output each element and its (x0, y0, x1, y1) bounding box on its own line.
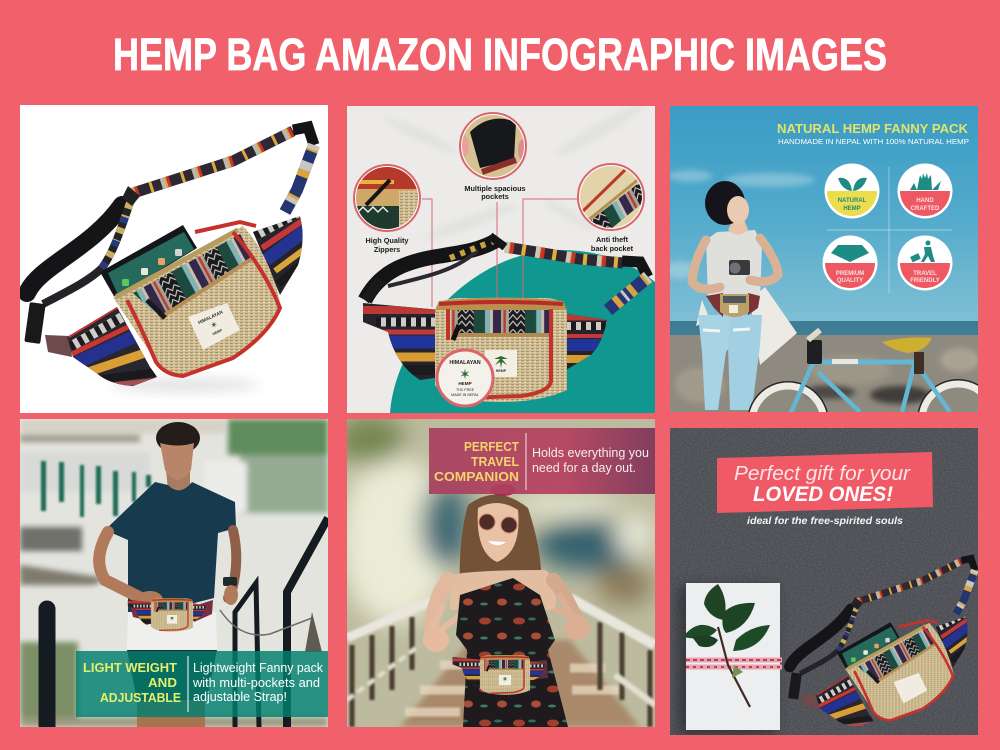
badge: hand crafted: CRAFTED (911, 206, 940, 212)
subheading: HANDMADE IN NEPAL WITH 100% NATURAL HEMP (778, 137, 969, 146)
badge grid dividers (827, 167, 952, 293)
callout connector lines (422, 199, 577, 307)
clouds (664, 170, 815, 279)
badge: hand crafted: HAND (916, 198, 934, 204)
bag label text: HEMP (496, 369, 507, 373)
caption heading: COMPANION (434, 469, 519, 484)
bag label text (198, 310, 223, 336)
caption body: Holds everything you (532, 446, 649, 460)
callout: spacious pockets (457, 113, 528, 201)
caption band (429, 428, 655, 494)
belt straps (365, 236, 648, 310)
gift box (683, 583, 782, 730)
wall texture (675, 348, 980, 404)
icon: hand with leaves (910, 173, 941, 190)
caption heading: PERFECT (464, 439, 519, 454)
label detail circle: HEMP (458, 381, 472, 386)
caption body: Lightweight Fanny pack (193, 660, 323, 675)
icon: diamond (831, 245, 869, 262)
right railing (570, 598, 655, 727)
back pocket caption second line: back pocket (591, 244, 634, 253)
blurred surroundings (20, 419, 328, 727)
pockets caption: Multiple spacious (464, 184, 526, 193)
stone wall (670, 335, 978, 412)
holly sprig (683, 584, 770, 707)
badge: natural hemp: NATURAL (838, 198, 867, 204)
caption body: adjustable Strap! (193, 689, 287, 704)
teal circle backdrop (390, 250, 655, 413)
zipper caption: High Quality (366, 236, 409, 245)
badge: travel friendly: TRAVEL (913, 271, 937, 277)
foliage blobs (335, 415, 655, 625)
caption body: need for a day out. (532, 461, 636, 475)
twine ribbon (686, 660, 782, 667)
caption body (532, 446, 649, 475)
stair treads (405, 665, 620, 712)
hemp fanny pack with tablet (24, 127, 314, 386)
callout: anti theft back pocket (578, 164, 646, 253)
bag label text: HEMP (212, 328, 223, 336)
panel: travel companion photo (335, 415, 655, 727)
marble veins (393, 109, 636, 235)
stairs (400, 640, 640, 727)
icon: leaves (838, 178, 867, 191)
callout: high quality zippers (354, 165, 420, 254)
panel: natural hemp beach photo (670, 106, 978, 412)
sky (670, 106, 978, 322)
pockets caption second line: pockets (481, 192, 509, 201)
woman (423, 484, 590, 727)
caption divider (525, 433, 527, 490)
badge: hand crafted (898, 164, 952, 218)
buckle (364, 299, 370, 303)
hemp bag on carpet (788, 559, 975, 727)
label detail circle: THC FREE (456, 388, 475, 392)
zipper caption second line: Zippers (374, 245, 400, 254)
carpet texture (670, 428, 978, 735)
badge: natural hemp (824, 164, 880, 218)
back pocket caption: Anti theft (596, 235, 629, 244)
pocket detail circle (457, 113, 528, 179)
bag label text: HIMALAYAN (197, 309, 224, 325)
woman with bag (692, 181, 797, 410)
banner line one: Perfect gift for your (734, 463, 911, 485)
panel background (20, 105, 328, 413)
caption divider (187, 656, 189, 712)
carpet background (670, 428, 978, 735)
caption heading: TRAVEL (471, 454, 519, 469)
banner line two: LOVED ONES! (753, 483, 893, 506)
gift tagline: ideal for the free-spirited souls (747, 516, 903, 527)
hemp bag front (361, 298, 611, 402)
concrete background (20, 419, 328, 727)
caption heading (434, 439, 519, 484)
bicycle (748, 328, 978, 412)
badge: premium quality (822, 236, 878, 290)
label detail circle: HIMALAYAN (449, 360, 481, 366)
blurred foliage background (347, 419, 655, 727)
runner (99, 422, 238, 727)
left railing (347, 597, 440, 727)
back pocket detail circle (578, 164, 646, 238)
badge: natural hemp: HEMP (843, 206, 861, 212)
panel: features callouts (347, 99, 655, 413)
caption body (192, 660, 323, 704)
gift box shadow (678, 586, 776, 736)
bag label text: ✶ (208, 319, 220, 331)
railings (47, 518, 328, 727)
label detail circle (437, 350, 493, 406)
gift banner (717, 452, 933, 513)
green fence posts (41, 461, 151, 517)
caption heading: ADJUSTABLE (100, 690, 181, 705)
heading: NATURAL HEMP FANNY PACK (777, 122, 968, 136)
zipper detail circle (354, 165, 420, 231)
bag on woman (452, 655, 548, 695)
icon: traveller (910, 240, 935, 262)
label detail circle: MADE IN NEPAL (451, 393, 479, 397)
marble background (347, 106, 655, 413)
caption heading (83, 660, 181, 705)
caption body: with multi-pockets and (192, 675, 320, 690)
caption heading: AND (148, 675, 177, 690)
badge: premium quality: PREMIUM (836, 271, 864, 277)
label detail circle: ✶ (459, 366, 471, 382)
bag shadow (110, 377, 260, 393)
panel: light weight runner photo (20, 419, 328, 727)
sea (670, 321, 978, 336)
bag on runner (127, 598, 213, 632)
caption band (76, 651, 328, 717)
panel: gift on carpet (670, 428, 978, 736)
badge: travel friendly (898, 236, 952, 290)
panel: white product shot (20, 105, 328, 413)
caption heading: LIGHT WEIGHT (83, 660, 177, 675)
badge: travel friendly: FRIENDLY (910, 278, 940, 284)
badge: premium quality: QUALITY (837, 278, 863, 284)
